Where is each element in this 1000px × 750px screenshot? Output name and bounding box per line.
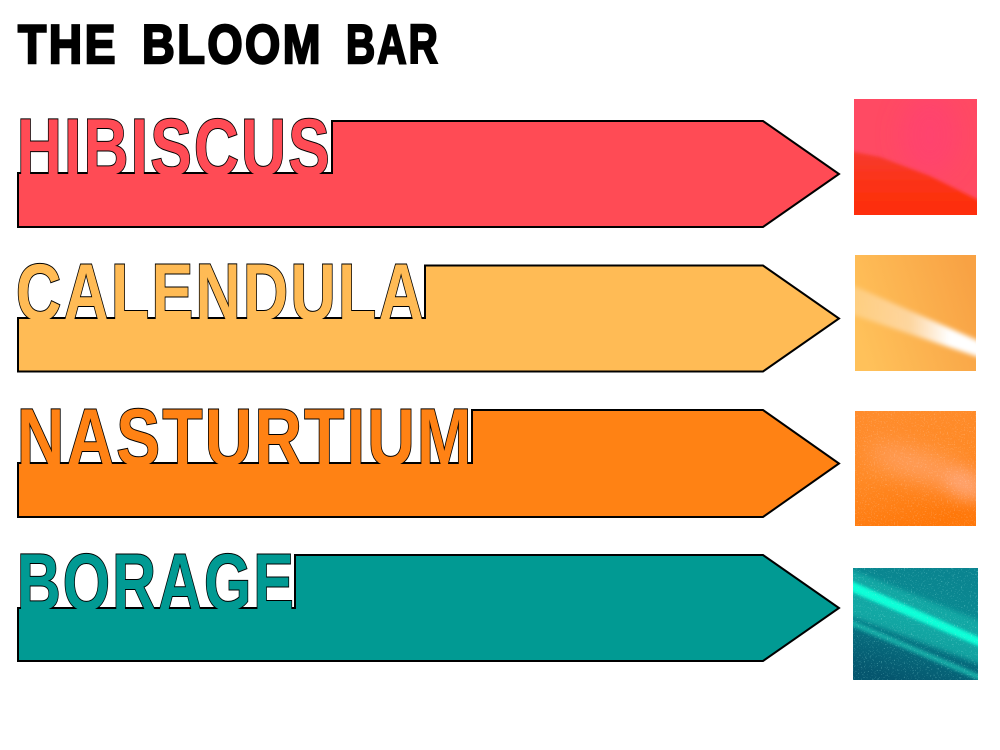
arrow: borage	[18, 555, 839, 661]
arrow: hibiscus	[18, 121, 839, 227]
swatch: nasturtium	[855, 411, 976, 526]
label: nasturtium: NASTURTIUM	[17, 393, 474, 483]
swatch: hibiscus	[854, 99, 977, 215]
row: borage	[17, 552, 841, 662]
swatch: calendula	[855, 255, 976, 371]
label: calendula: CALENDULA	[16, 248, 426, 338]
title: BAR	[346, 13, 440, 75]
label: hibiscus: HIBISCUS	[17, 103, 332, 193]
row: nasturtium	[17, 408, 841, 518]
swatch: borage	[853, 568, 978, 680]
row: calendula	[17, 262, 841, 372]
arrow: calendula	[18, 266, 839, 372]
title: BLOOM	[142, 13, 323, 75]
arrow: nasturtium	[18, 410, 839, 517]
row: hibiscus	[17, 118, 841, 228]
title	[18, 13, 440, 75]
title: THE	[18, 13, 118, 75]
label: borage: BORAGE	[17, 538, 296, 628]
